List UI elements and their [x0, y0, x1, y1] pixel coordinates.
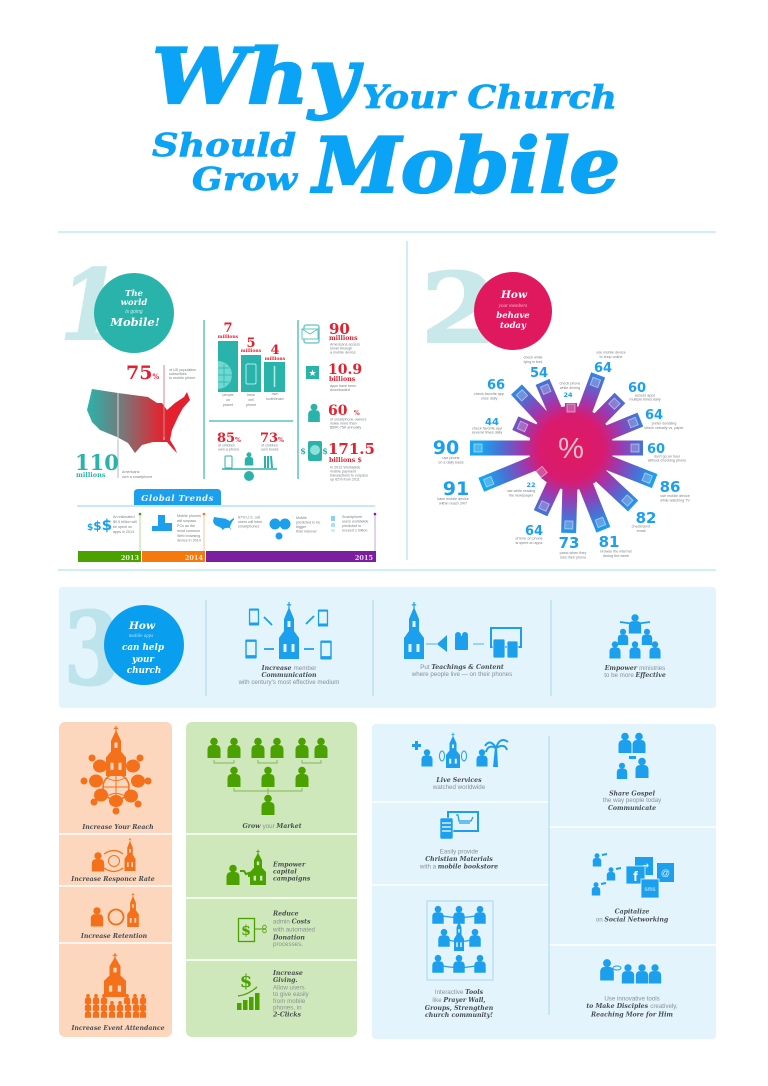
radial percentage chart: 60 [628, 381, 646, 396]
trend items: predicted to [342, 524, 361, 528]
item: share gospel [603, 733, 662, 812]
item: put teachings and content on phones [404, 602, 522, 678]
trend items: $9.5 billion will [113, 520, 137, 524]
item: reduce admin costs: processes. [273, 941, 303, 948]
radial percentage chart: don't go an hour [654, 454, 681, 458]
title: Grow [192, 160, 299, 198]
radial percentage chart: 73 [559, 534, 579, 552]
item: empower ministries: to be more Effective [604, 672, 666, 679]
trend items: smartphones [238, 524, 259, 528]
item: put teachings and content on phones: where people live — on their phones [411, 671, 512, 678]
numeral 3: 3 [64, 590, 120, 708]
bar chart: people, phones, toothbrushes [218, 321, 286, 407]
mobile stats column: billions [329, 376, 356, 383]
item: live services [412, 733, 508, 791]
item: put teachings and content on phones: Put Teachings & Content [420, 664, 504, 671]
US map with smartphone stats: 75% [126, 362, 159, 384]
mobile stats column: a mobile device [330, 350, 356, 354]
radial percentage chart: use while reading [507, 489, 535, 493]
bar chart: people, phones, toothbrushes: 5 [246, 336, 256, 351]
year bars: 2015 [355, 554, 373, 562]
tab: global trends [134, 489, 221, 505]
title: Mobile [310, 121, 620, 210]
radial percentage chart: browse the internet [600, 550, 632, 554]
radial percentage chart: while driving [560, 386, 580, 390]
trend items: apps in 2013 [113, 530, 134, 534]
radial percentage chart: % [558, 433, 584, 465]
item: increase event attendance: Increase Event Attendance [70, 1025, 165, 1032]
US map with smartphone stats [75, 362, 196, 479]
trend items: be spent on [113, 525, 132, 529]
radial percentage chart: have mobile device [437, 497, 469, 501]
radial percentage chart: 54 [530, 366, 548, 381]
year bars [78, 513, 376, 562]
radial percentage chart: check favorite app [474, 392, 504, 396]
radial percentage chart: of time on phone [515, 536, 543, 540]
mobile stats column: transactions to surpass [330, 474, 368, 478]
panel: green, market and giving [186, 722, 357, 1037]
badge: the world is going mobile [94, 273, 174, 353]
numeral 1: 1 [60, 249, 120, 362]
item: increase member communication: with century's most effective medium [238, 679, 339, 686]
mobile stats column: 60 [328, 403, 348, 419]
mobile stats column: mobile payment [330, 470, 356, 474]
item: share gospel: Share Gospel [609, 790, 656, 798]
radial percentage chart: use phone [442, 456, 460, 460]
item: capitalize on social networking: @ [661, 868, 670, 878]
bar chart: people, phones, toothbrushes: on [226, 398, 230, 402]
global trends timeline [77, 489, 376, 562]
item: empower capital campaigns [226, 850, 311, 885]
item: reduce admin costs: with automated [272, 926, 316, 934]
item: interactive tools: Groups, Strengthen [425, 1005, 494, 1012]
trend items: Mobile [296, 516, 307, 520]
badge: how your members behave today: your members [498, 304, 527, 309]
item: increase your reach [80, 726, 154, 831]
badge: the world is going mobile: The [125, 289, 144, 299]
item: empower ministries [604, 614, 666, 679]
item: grow your market: Grow your Market [242, 823, 302, 830]
children stats and balance [217, 431, 284, 481]
badge: how your members behave today [474, 272, 552, 350]
badge: how mobile apps can help your church: church [127, 666, 161, 676]
radial percentage chart: 44 [485, 417, 499, 428]
radial percentage chart: to shop online [600, 355, 622, 359]
mobile stats column: $ [300, 446, 306, 456]
badge: how mobile apps can help your church: mobile apps [129, 634, 153, 639]
item: interactive tools: like Prayer Wall, [432, 997, 486, 1004]
mobile stats column: downloaded [330, 388, 350, 392]
mobile stats column [300, 320, 375, 482]
radial percentage chart: the newspaper [509, 494, 534, 498]
radial percentage chart: panic when they [560, 551, 586, 555]
year bars: 2014 [185, 554, 203, 562]
item: make disciples [586, 959, 678, 1018]
trend items: Web browsing [177, 534, 200, 538]
item: capitalize on social networking: sms [644, 887, 656, 893]
numeral 2: 2 [421, 252, 497, 365]
trend items: users will have [238, 520, 262, 524]
radial percentage chart: during the week [603, 554, 629, 558]
item: share gospel: the way people today [603, 797, 662, 804]
trend items: will surpass [177, 519, 196, 523]
badge: the world is going mobile: is going [125, 309, 143, 315]
item: empower ministries: Empower ministries [604, 665, 665, 672]
radial percentage chart: 66 [487, 378, 505, 393]
trend items: Mobile phones [177, 514, 201, 518]
radial percentage chart: access apps [635, 394, 655, 398]
title: Should [152, 126, 296, 164]
item: interactive tools: church community! [425, 1012, 493, 1019]
item: increase member communication: Increase member [261, 665, 316, 672]
panel: blue, tools and networking [372, 724, 716, 1039]
radial percentage chart: 22 [526, 481, 536, 489]
panel: section 3, how mobile apps can help your church [59, 587, 716, 708]
children stats and balance: own books [261, 448, 279, 452]
mobile stats column: $50K-75K annually [330, 426, 361, 430]
year bars: 2013 [121, 554, 139, 562]
item: empower capital campaigns: capital [273, 868, 297, 876]
mobile stats column: 90 [329, 320, 350, 338]
item: increase giving: $ [240, 971, 252, 992]
trend items: exceed 1 billion [342, 528, 367, 532]
item: reduce admin costs: $ [241, 923, 251, 939]
mobile stats column: millions [329, 335, 358, 342]
radial percentage chart: is spent on apps [516, 541, 543, 545]
trend items [87, 514, 368, 542]
mobile stats column: billions $ [329, 457, 362, 464]
item: increase retention: Increase Retention [80, 933, 148, 940]
item: reduce admin costs: admin Costs [273, 918, 311, 926]
panel: section 1, the world is going mobile [60, 249, 376, 562]
trend items: $$$ [87, 516, 112, 534]
item: increase giving: phones, in [273, 1004, 302, 1012]
title: Why [152, 32, 363, 121]
item: interactive tools: Interactive Tools [435, 989, 484, 996]
radial percentage chart: check while [523, 356, 543, 360]
radial percentage chart: multiple times daily [629, 398, 661, 402]
item: increase giving: Allow users [273, 984, 305, 992]
badge: how mobile apps can help your church: How [128, 620, 156, 632]
US map with smartphone stats: to mobile phone [169, 376, 195, 380]
item: increase your reach: Increase Your Reach [81, 824, 154, 831]
item: increase giving [237, 970, 310, 1018]
radial percentage chart: without checking phone [648, 458, 686, 462]
panel: orange, increase reach and retention [59, 722, 172, 1037]
radial percentage chart: on a daily basis [438, 460, 464, 464]
bar chart: people, phones, toothbrushes: cell [248, 398, 254, 402]
radial percentage chart: lying in bed [524, 360, 542, 364]
radial percentage chart: 86 [660, 478, 680, 496]
radial percentage chart: 82 [636, 509, 656, 527]
mobile stats column: 171.5 [328, 440, 375, 458]
radial percentage chart: while watching TV [660, 498, 690, 502]
radial percentage chart: prefer donating [652, 422, 676, 426]
children stats and balance: of children [261, 444, 278, 448]
panel: section 2, how your members behave today [421, 252, 690, 560]
bar chart: people, phones, toothbrushes: people [222, 393, 234, 397]
mobile stats column: make more than [330, 422, 357, 426]
item: christian materials mobile bookstore: Christian Materials [425, 856, 493, 863]
trend items: 87% U.S. cell [238, 516, 260, 520]
mobile stats column: In 2012 Worldwide [330, 466, 360, 470]
radial percentage chart: lose their phone [560, 556, 586, 560]
item: increase giving: Increase [272, 970, 303, 977]
item: interactive tools [425, 901, 494, 1019]
radial percentage chart: 81 [599, 533, 619, 551]
US map with smartphone stats: millions [76, 471, 106, 479]
item: reduce admin costs [238, 910, 316, 948]
trend items: most common [177, 529, 200, 533]
radial percentage chart: 91 [443, 478, 469, 500]
item: make disciples: to Make Disciples creatively, [586, 1003, 678, 1010]
badge: how mobile apps can help your church: your [131, 655, 155, 665]
radial percentage chart: 64 [594, 361, 612, 376]
item: increase giving: to give easily [273, 991, 310, 998]
radial percentage chart: 64 [645, 408, 663, 423]
item: increase member communication: Communication [261, 672, 317, 679]
bar chart: people, phones, toothbrushes: own [272, 392, 278, 396]
bar chart: people, phones, toothbrushes: millions [218, 334, 239, 340]
bar chart: people, phones, toothbrushes: toothbrush [266, 397, 284, 401]
radial percentage chart: use mobile device [596, 350, 626, 354]
trend items: predicted to be [296, 520, 320, 524]
trend items: device in 2014 [177, 538, 201, 542]
item: make disciples: Use innovative tools [604, 996, 660, 1002]
US map with smartphone stats: Americans [122, 470, 140, 474]
bar chart: people, phones, toothbrushes: 4 [270, 343, 280, 358]
badge: the world is going mobile: world [121, 298, 147, 308]
mobile stats column: of smartphone owners [330, 418, 367, 422]
item: capitalize on social networking: f [633, 868, 638, 884]
radial percentage chart: 90 [433, 437, 459, 459]
item: capitalize on social networking: on Social Networking [596, 916, 669, 924]
item: live services: watched worldwide [432, 784, 486, 791]
US map with smartphone stats: of US population [169, 368, 196, 372]
item: increase response rate: Increase Responce Rate [70, 876, 155, 883]
item: empower capital campaigns: Empower [272, 862, 306, 868]
item: capitalize on social networking: ➜ [643, 861, 650, 870]
mobile stats column: $ [322, 446, 328, 456]
item: reduce admin costs: Reduce [272, 910, 299, 918]
item: share gospel: Communicate [608, 805, 656, 812]
US map with smartphone stats: 110 [75, 450, 119, 475]
item: empower capital campaigns: campaigns [273, 876, 311, 882]
trend items: bigger [296, 525, 307, 529]
radial percentage chart: 64 [525, 524, 543, 539]
radial percentage chart: email [637, 529, 646, 533]
item: make disciples: Reaching More for Him [590, 1012, 673, 1018]
radial percentage chart [433, 350, 690, 560]
trend items: Smartphone [342, 515, 362, 519]
badge: how your members behave today: behave [496, 311, 530, 321]
children stats and balance: of children [218, 444, 235, 448]
item: christian materials mobile bookstore [419, 811, 498, 870]
bar chart: people, phones, toothbrushes: 7 [223, 321, 233, 336]
radial percentage chart: 24 [563, 391, 573, 399]
mobile stats column: email through [330, 346, 352, 350]
US map with smartphone stats: own a smartphone [122, 475, 152, 479]
radial percentage chart: check virtually vs. paper [644, 426, 684, 430]
item: increase member communication [238, 602, 339, 686]
radial percentage chart: check/send [632, 524, 650, 528]
radial percentage chart: several times daily [472, 430, 502, 434]
trend items: An estimated [113, 515, 135, 519]
item: christian materials mobile bookstore: with a mobile bookstore [419, 864, 498, 870]
title: Your Church [362, 78, 617, 116]
radial percentage chart: 60 [647, 442, 665, 457]
radial percentage chart: within reach 24/7 [439, 502, 467, 506]
radial percentage chart: use mobile device [660, 494, 690, 498]
mobile stats column: Americans access [330, 342, 360, 346]
trend items: than internet [296, 530, 317, 534]
bar chart: people, phones, toothbrushes: millions [241, 348, 262, 354]
trend items: PCs as the [177, 524, 195, 528]
item: increase event attendance [70, 953, 165, 1032]
tab: global trends: Global Trends [141, 494, 214, 504]
mobile stats column: ★ [308, 369, 317, 379]
item: capitalize on social networking [592, 853, 674, 924]
item: increase response rate [70, 838, 155, 883]
children stats and balance: own a phone [218, 448, 239, 452]
item: increase giving: 2-Clicks [272, 1012, 302, 1018]
bar chart: people, phones, toothbrushes: phone [246, 403, 256, 407]
item: reduce admin costs: Donation [272, 934, 305, 942]
mobile stats column: 10.9 [328, 362, 362, 378]
mobile stats column: up 62% from 2011 [330, 478, 360, 482]
bar chart: people, phones, toothbrushes: millions [265, 356, 286, 362]
badge: how your members behave today: How [500, 289, 528, 301]
radial percentage chart: check phone [560, 382, 580, 386]
badge: how mobile apps can help your church [104, 605, 184, 685]
item: christian materials mobile bookstore: Easily provide [440, 848, 479, 856]
badge: the world is going mobile: Mobile! [109, 315, 160, 329]
radial percentage chart: check favorite app [472, 426, 502, 430]
item: increase retention [80, 893, 148, 940]
children stats and balance: 73% [260, 431, 284, 446]
item: increase giving: from mobile [273, 998, 306, 1005]
US map with smartphone stats: subscribes [169, 372, 187, 376]
badge: how mobile apps can help your church: can help [122, 643, 165, 653]
mobile stats column: apps have been [330, 384, 356, 388]
bar chart: people, phones, toothbrushes: planet [223, 403, 233, 407]
children stats and balance: 85% [217, 431, 241, 446]
mobile stats column: % [354, 410, 360, 417]
item: capitalize on social networking: Capitalize [615, 908, 649, 916]
badge: how your members behave today: today [500, 321, 527, 331]
trend items: users worldwide [342, 520, 368, 524]
item: increase giving: Giving. [273, 977, 298, 984]
radial percentage chart: once daily [481, 396, 497, 400]
bar chart: people, phones, toothbrushes: have [247, 393, 255, 397]
title [152, 32, 620, 210]
item: live services: Live Services [435, 777, 482, 784]
item: grow your market [208, 738, 328, 830]
